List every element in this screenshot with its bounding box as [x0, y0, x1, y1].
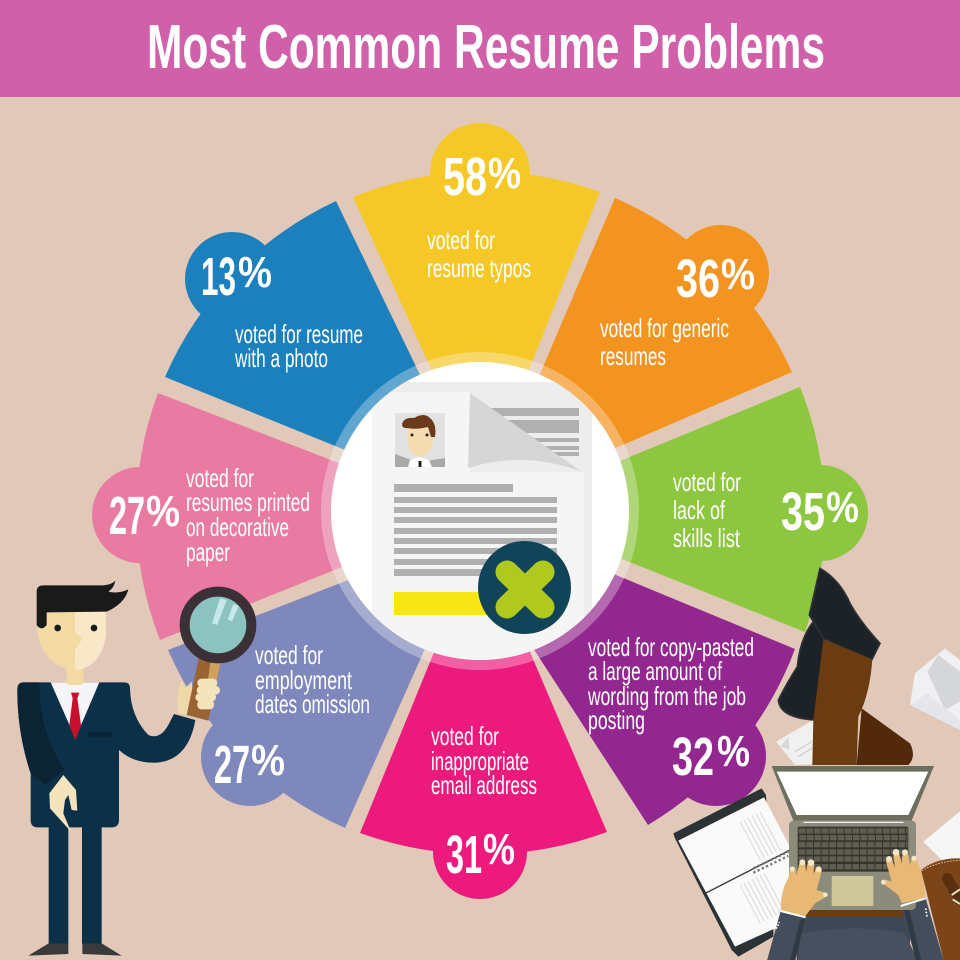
panel: 31% inappropriate email address: voted for	[431, 721, 499, 751]
legs	[49, 823, 102, 944]
panel: 31% inappropriate email address: 31	[446, 825, 482, 885]
panel: 58% resume typos: voted for	[427, 225, 495, 255]
panel: 35% lack of skills list: voted for	[673, 467, 741, 497]
crumpled envelope	[910, 648, 960, 730]
bag	[921, 858, 960, 960]
left sleeve	[17, 682, 65, 785]
panel: 58% resume typos: 58	[443, 147, 487, 207]
icon: laptop	[772, 766, 934, 910]
panel: 13% resume with a photo: 13	[201, 247, 236, 307]
panel: 27% employment dates omission: %	[251, 736, 285, 785]
panel: 27% decorative paper	[92, 393, 352, 640]
icon: X badge	[478, 541, 571, 634]
title banner	[0, 0, 960, 97]
illustration: person at laptop on desk	[673, 568, 960, 960]
panel: 13% resume with a photo	[165, 201, 423, 454]
shoes	[28, 943, 122, 956]
panel: 58% resume typos	[353, 123, 600, 382]
panel: 32% copy-pasted wording: posting	[588, 705, 645, 735]
arm and leg skin	[812, 639, 913, 765]
panel: 13% resume with a photo: voted for resume	[235, 319, 363, 349]
panel: 27% employment dates omission	[168, 577, 428, 828]
panel: 13% resume with a photo: %	[238, 248, 272, 297]
panel: 58% resume typos: %	[488, 149, 521, 198]
panel: 27% employment dates omission: 27	[214, 735, 250, 795]
white paper	[923, 810, 960, 863]
panel: 27% decorative paper: 27	[109, 486, 145, 546]
panel: 35% lack of skills list: 35	[781, 482, 825, 542]
panel: 27% employment dates omission: employment	[255, 665, 353, 695]
panel: 36% generic resumes: resumes	[600, 341, 666, 371]
jacket	[17, 682, 195, 827]
panel: 31% inappropriate email address	[360, 645, 607, 899]
panel: 58% resume typos: resume typos	[427, 253, 531, 283]
panel: 32% copy-pasted wording: voted for copy-pasted	[588, 632, 754, 662]
panel: 32% copy-pasted wording: wording from the job	[587, 681, 746, 711]
panel: 31% inappropriate email address: %	[483, 825, 515, 874]
panel: 32% copy-pasted wording: a large amount of	[588, 656, 723, 686]
hair	[778, 568, 880, 720]
body	[767, 898, 944, 960]
panel: 35% lack of skills list: skills list	[673, 523, 741, 553]
panel: 36% generic resumes: voted for generic	[600, 313, 729, 343]
panel: 27% employment dates omission: voted for	[255, 640, 323, 670]
panel: 27% decorative paper: %	[146, 487, 180, 536]
icon: magnifying glass	[185, 592, 251, 721]
hand at side	[49, 775, 77, 832]
panel: 35% lack of skills list: %	[826, 483, 859, 532]
icon: resume document	[372, 382, 592, 662]
panel: 36% generic resumes: %	[721, 250, 755, 299]
panel: 32% copy-pasted wording: 32	[672, 727, 714, 787]
icon: notebook	[673, 788, 793, 957]
panel: 31% inappropriate email address: inappropriate	[431, 746, 529, 776]
panel: 27% decorative paper: resumes printed	[186, 487, 310, 517]
panel: 27% decorative paper: paper	[186, 537, 230, 567]
panel: 27% decorative paper: on decorative	[186, 512, 289, 542]
panel: 27% decorative paper: voted for	[186, 463, 254, 493]
panel: 36% generic resumes: 36	[676, 249, 720, 309]
panel: 36% generic resumes	[537, 198, 792, 453]
illustration: businessman with magnifying glass	[17, 581, 251, 956]
neck and head	[37, 581, 128, 685]
panel: 35% lack of skills list	[607, 387, 868, 632]
panel: 27% employment dates omission: dates omission	[255, 689, 370, 719]
center circle with halo	[321, 352, 639, 670]
paper sheet	[776, 720, 813, 765]
panel: 32% copy-pasted wording	[531, 570, 795, 825]
panel: 31% inappropriate email address: email address	[431, 770, 537, 800]
raised hand	[178, 680, 195, 715]
panel: 35% lack of skills list: lack of	[673, 495, 726, 525]
panel: 32% copy-pasted wording: %	[717, 727, 750, 776]
hands	[781, 849, 926, 917]
panel: 13% resume with a photo: with a photo	[234, 343, 328, 373]
shirt and tie	[51, 682, 99, 740]
photo	[395, 413, 445, 467]
